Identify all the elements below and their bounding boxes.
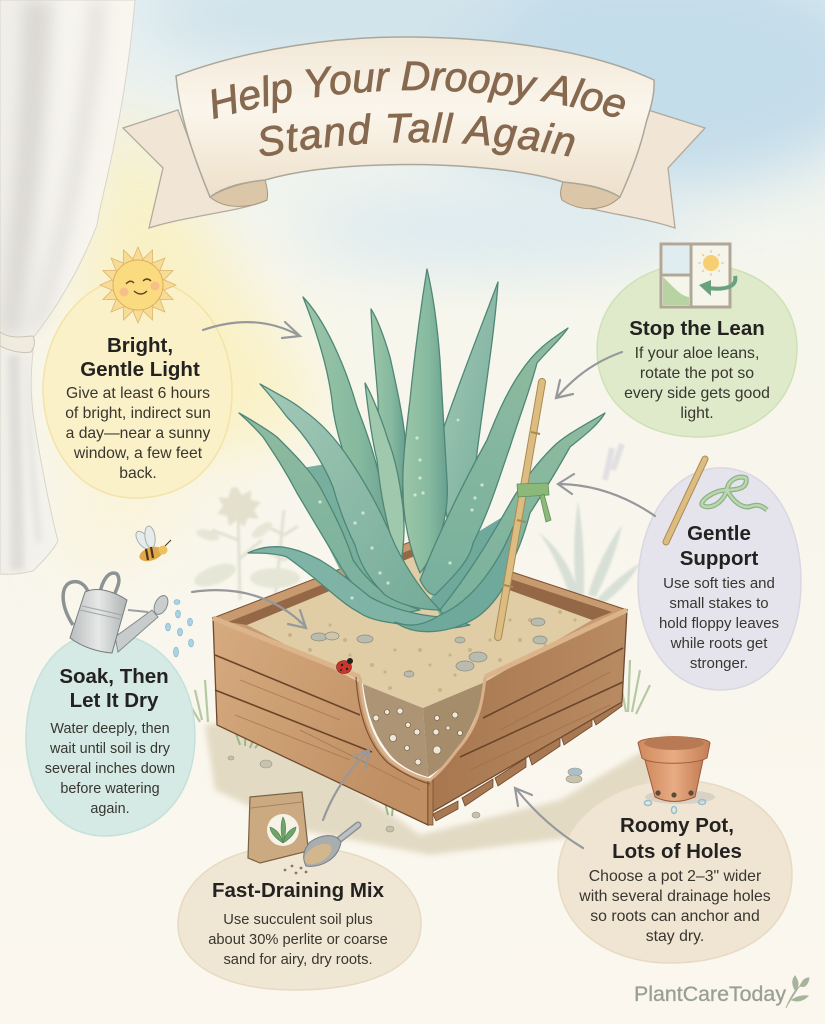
banner right tail	[563, 110, 705, 228]
text block: stronger.	[690, 655, 748, 672]
leaf: left rear	[303, 297, 395, 555]
arrow: mix to cutaway	[323, 750, 369, 820]
leaf: low left	[248, 547, 470, 629]
leaf: far right	[440, 413, 605, 625]
arrow: light to plant	[203, 322, 300, 338]
crate planter	[213, 540, 627, 825]
title banner	[122, 36, 706, 229]
arrow: pot to crate	[515, 788, 583, 848]
text block: before watering	[60, 781, 160, 797]
heading: Soak, Then	[59, 665, 169, 688]
leaf: big right	[420, 328, 568, 595]
curtain	[0, 0, 135, 574]
icon: stake and ribbon	[666, 459, 767, 542]
leaf: centre	[403, 269, 447, 573]
leaf: upper right rear	[442, 282, 498, 535]
icon: window	[661, 244, 735, 307]
icon: bee	[133, 525, 171, 564]
text block: Give at least 6 hours	[66, 385, 210, 402]
panel: fast-draining mix	[178, 792, 421, 990]
text block: light.	[680, 405, 714, 422]
heading: Bright,	[107, 334, 173, 357]
text block: a day—near a sunny	[66, 425, 211, 442]
text block: Use succulent soil plus	[223, 912, 373, 928]
soil surface	[247, 556, 592, 708]
leaf: small inner	[365, 383, 404, 570]
arrow: water to soil	[192, 590, 306, 628]
text block: wait until soil is dry	[49, 741, 171, 757]
text block: rotate the pot so	[640, 365, 754, 382]
heading: Gentle Light	[80, 358, 200, 381]
leaf: base mass	[290, 460, 420, 610]
ground wash and grass	[190, 660, 670, 855]
text block: hold floppy leaves	[659, 615, 779, 632]
logo	[634, 976, 809, 1008]
arrow: lean to plant	[556, 352, 622, 398]
water droplets	[318, 419, 484, 600]
icon: terracotta pot	[638, 736, 715, 814]
panel: gentle support	[638, 459, 801, 690]
text block: back.	[119, 465, 157, 482]
soil cutaway	[356, 677, 485, 784]
logo: PlantCareToday	[634, 983, 787, 1006]
heading: Lots of Holes	[612, 840, 742, 863]
heading: Support	[680, 547, 758, 570]
text block: Water deeply, then	[50, 721, 170, 737]
text block: If your aloe leans,	[635, 345, 759, 362]
text block: window, a few feet	[73, 445, 203, 462]
leaf: inner left	[371, 309, 405, 510]
bamboo stake and tie	[498, 382, 551, 637]
banner left tail	[123, 110, 267, 228]
crate rim	[213, 610, 627, 677]
text block: several inches down	[45, 761, 175, 777]
text block: of bright, indirect sun	[65, 405, 211, 422]
text block: stay dry.	[646, 928, 704, 945]
small stones and pebbles	[228, 756, 582, 832]
panel: bright gentle light	[43, 247, 232, 498]
panel: soak then dry	[26, 573, 195, 836]
text block: while roots get	[670, 635, 768, 652]
panel: roomy pot	[558, 736, 792, 963]
icon: sun	[100, 247, 176, 323]
text block: small stakes to	[669, 595, 769, 612]
leaf: bottom swirl	[395, 527, 515, 632]
heading: Let It Dry	[70, 689, 159, 712]
crate feet	[433, 696, 622, 821]
panel: stop the lean	[597, 244, 797, 437]
background plants	[191, 444, 640, 606]
icon: watering can	[63, 573, 194, 657]
text block: with several drainage holes	[578, 888, 771, 905]
heading: Gentle	[687, 522, 751, 545]
crate left face	[213, 618, 428, 825]
crate right face	[432, 610, 627, 812]
leaf: left big	[260, 384, 440, 610]
icon: soil bag and scoop	[248, 792, 358, 874]
heading: Stop the Lean	[629, 317, 765, 340]
heading: Roomy Pot,	[620, 814, 734, 837]
text block: so roots can anchor and	[590, 908, 760, 925]
title banner: Stand Tall Again	[259, 112, 574, 156]
text block: every side gets good	[624, 385, 770, 402]
arrows	[192, 322, 655, 848]
text block: Choose a pot 2–3" wider	[589, 868, 761, 885]
crate top and inner walls	[213, 540, 627, 700]
heading: Fast-Draining Mix	[212, 879, 385, 902]
leaf: base mass right	[430, 505, 522, 622]
leaf: far left	[239, 413, 420, 615]
text block: again.	[90, 801, 130, 817]
aloe plant	[239, 269, 605, 632]
text block: Use soft ties and	[663, 575, 775, 592]
title text: Help Your Droopy Aloe	[212, 61, 626, 120]
icon: ladybug	[336, 658, 353, 674]
text block: sand for airy, dry roots.	[223, 952, 373, 968]
text block: about 30% perlite or coarse	[208, 932, 388, 948]
arrow: support to tie	[558, 474, 655, 516]
